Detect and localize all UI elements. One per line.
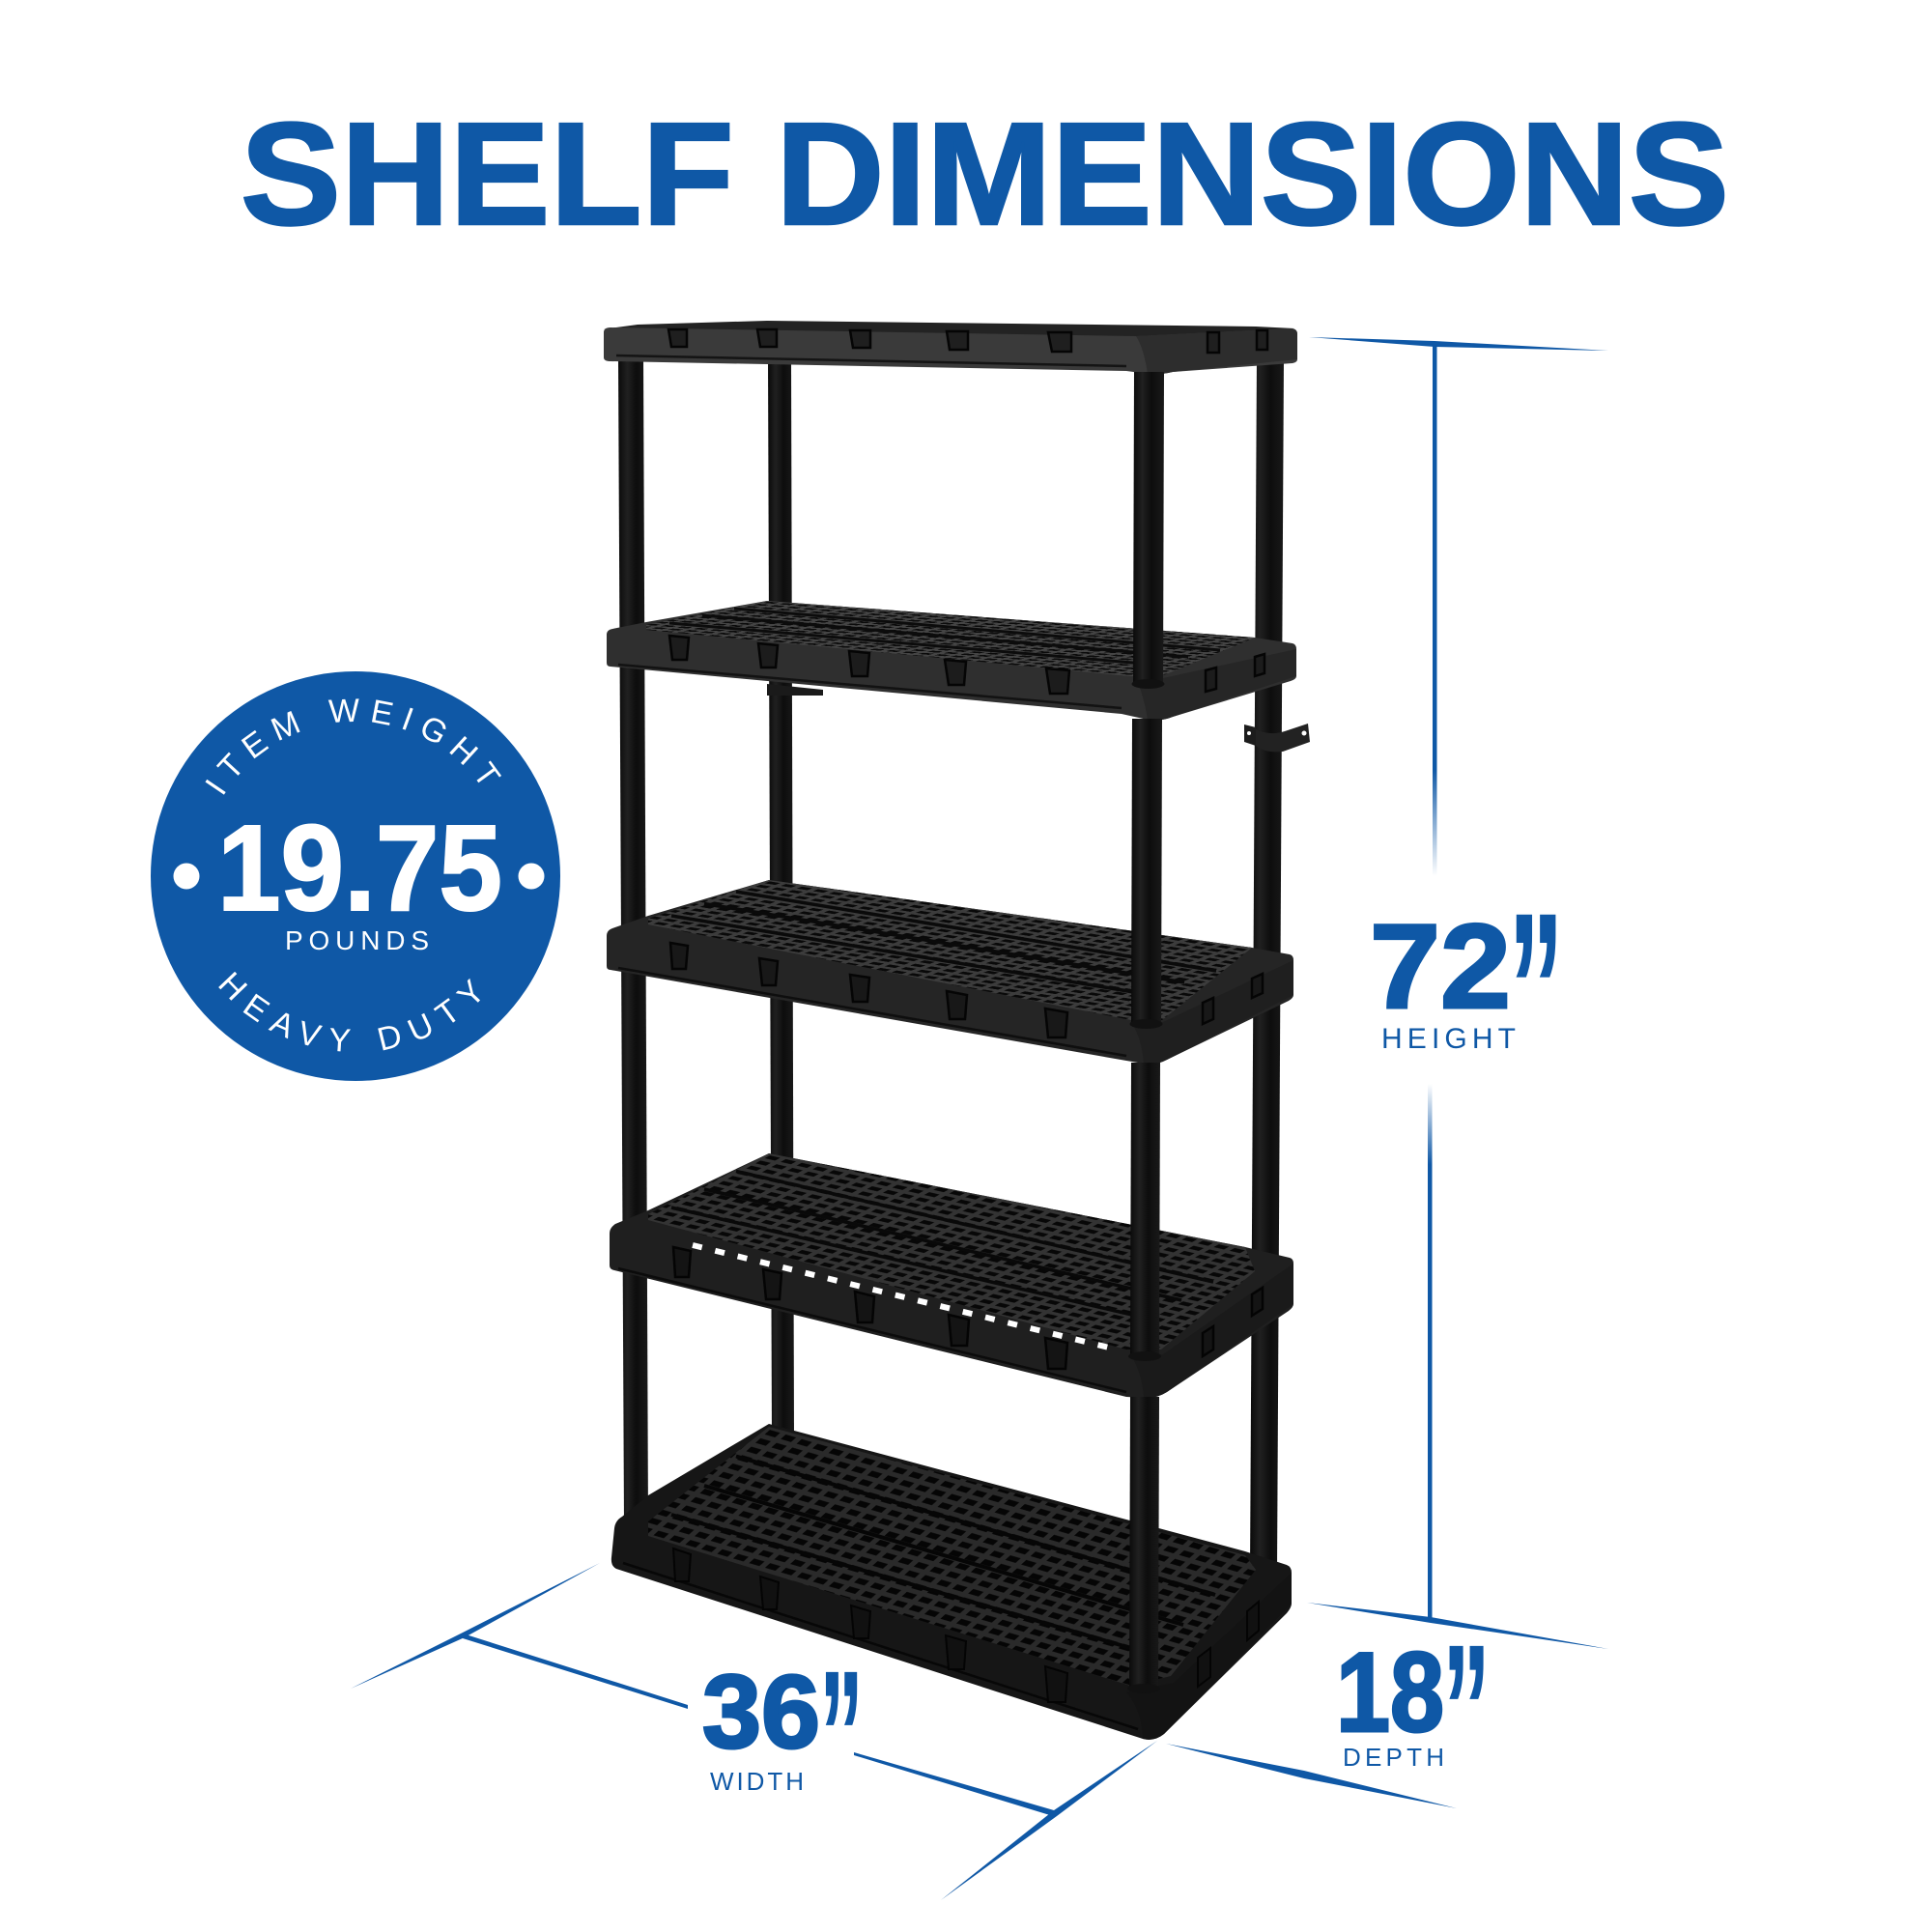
depth line	[1166, 1744, 1457, 1808]
shelf body	[610, 1153, 1293, 1398]
depth value: ”	[1442, 1605, 1491, 1816]
notches	[669, 636, 1264, 694]
corner shade	[1136, 328, 1297, 374]
grid	[648, 1153, 1255, 1350]
grid bands	[669, 609, 1220, 665]
notches	[670, 943, 1263, 1037]
right face shade	[1136, 649, 1296, 721]
right tick	[941, 1741, 1157, 1900]
top tick	[1309, 337, 1608, 351]
notches	[668, 329, 1267, 353]
lower edge	[618, 665, 1122, 708]
grid	[646, 601, 1255, 676]
width value: 36	[702, 1653, 820, 1770]
width label: WIDTH	[710, 1767, 804, 1796]
height dimension lines	[1307, 337, 1608, 1649]
height value: 72	[1370, 900, 1511, 1034]
grid bands	[671, 892, 1216, 995]
badge unit: POUNDS	[285, 925, 429, 955]
badge: item weight	[151, 671, 560, 1081]
depth value: 18	[1336, 1629, 1444, 1755]
third shelf	[607, 880, 1293, 1065]
grid bands	[671, 1457, 1215, 1654]
lower edge	[616, 355, 1126, 366]
shelf body	[607, 880, 1293, 1065]
text: ”	[819, 1632, 864, 1842]
second shelf	[607, 601, 1296, 721]
shelf body	[611, 1424, 1292, 1740]
grid bands	[671, 1171, 1213, 1319]
badge value: 19.75	[217, 800, 502, 936]
gaps along front	[693, 1245, 1109, 1348]
height value	[1370, 867, 1564, 1115]
top shelf	[604, 321, 1297, 374]
lower edge	[623, 1563, 1138, 1729]
top surface	[604, 321, 1294, 337]
badge dot right	[518, 864, 545, 889]
height label: HEIGHT	[1381, 1023, 1516, 1055]
badge arc text: heavy duty: HEAVY DUTY	[218, 972, 480, 1051]
fourth shelf	[610, 1153, 1293, 1398]
title: SHELF DIMENSIONS	[241, 92, 1729, 255]
depth label: DEPTH	[1343, 1743, 1444, 1772]
left tick	[351, 1563, 600, 1689]
right face shade	[1126, 1573, 1292, 1740]
lower edge	[618, 968, 1126, 1056]
posts behind shelves	[618, 357, 1284, 1575]
front right post	[1127, 372, 1165, 1693]
base shelf	[611, 1424, 1292, 1740]
badge arc text: item weight: ITEM WEIGHT	[205, 698, 501, 795]
right face shade	[1131, 1264, 1293, 1398]
lower edge	[618, 1268, 1126, 1392]
wall bracket	[1244, 724, 1310, 752]
upper vertical line	[1433, 343, 1437, 876]
notches	[673, 1247, 1263, 1369]
badge dot left	[174, 864, 199, 889]
width line left	[463, 1634, 688, 1709]
small tab under second shelf	[767, 684, 823, 696]
lower vertical line	[1428, 1084, 1432, 1621]
height value: ”	[1508, 867, 1564, 1115]
notches	[673, 1548, 1259, 1702]
width value	[702, 1632, 864, 1842]
right face shade	[1131, 960, 1293, 1065]
depth value	[1336, 1605, 1491, 1816]
shelf body	[607, 601, 1296, 721]
width dimension lines	[351, 1563, 1157, 1900]
shelf body	[604, 327, 1297, 374]
badge circle	[151, 671, 560, 1081]
shelf unit	[604, 321, 1310, 1740]
bottom tick	[1307, 1603, 1608, 1649]
grid	[648, 1427, 1256, 1686]
width line right	[854, 1752, 1054, 1816]
grid	[648, 880, 1252, 1020]
